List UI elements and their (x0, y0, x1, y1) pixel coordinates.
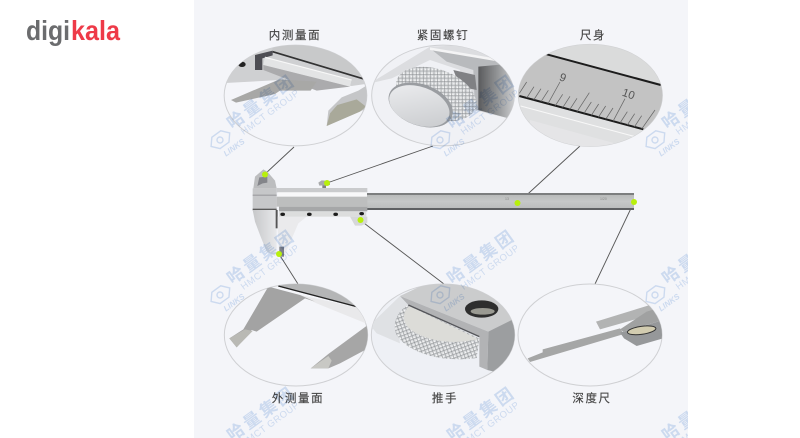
title label: locking screw: 紧固螺钉 (417, 29, 469, 42)
watermarks: brand pattern: HMCT GROUP (674, 88, 737, 138)
watermarks: brand pattern (210, 74, 688, 438)
watermarks: brand pattern: LINKS (442, 292, 467, 313)
watermarks: brand pattern: 哈量集团 (443, 70, 519, 133)
watermarks: brand pattern: HMCT GROUP (239, 88, 302, 138)
watermarks: brand pattern: LINKS (657, 137, 682, 158)
detail circle: main scale: 10 (620, 87, 636, 102)
fixed lower jaw (253, 210, 277, 256)
slider (277, 188, 367, 192)
watermarks: brand pattern: LINKS (442, 137, 467, 158)
marker dots (262, 172, 637, 257)
locking screw (318, 180, 330, 186)
detail circle: inner measuring face (220, 40, 370, 146)
watermarks: brand pattern: 哈量集团 (658, 225, 734, 288)
watermarks: brand pattern: 哈量集团 (658, 70, 734, 133)
thumb wheel (350, 217, 367, 226)
beam maker mark: 1/20 (600, 197, 607, 201)
title label: outer measuring face: 外测量面 (272, 392, 324, 405)
scale numerals on beam: 13 (505, 197, 509, 201)
watermarks: brand pattern: 哈量集团 (443, 225, 519, 288)
detail circle: depth rod (518, 284, 663, 386)
main beam (367, 193, 634, 210)
watermarks: brand pattern: 哈量集团 (223, 70, 299, 133)
upper jaw (253, 169, 277, 188)
watermarks: brand pattern: HMCT GROUP (239, 243, 302, 293)
watermarks: brand pattern: HMCT GROUP (459, 243, 522, 293)
detail circle: thumb wheel (370, 283, 515, 386)
watermarks: brand pattern: LINKS (222, 292, 247, 313)
watermarks: brand pattern: HMCT GROUP (459, 88, 522, 138)
watermarks: brand pattern: HMCT GROUP (674, 243, 737, 293)
detail circle: locking screw (370, 43, 515, 146)
logo: digikala (26, 15, 120, 46)
logo: digikala: digi (26, 15, 70, 46)
detail circle: outer measuring face (224, 280, 370, 386)
detail circle: main scale: 9 (558, 72, 568, 85)
title label: main scale: 尺身 (580, 28, 606, 42)
panel: product background (194, 0, 688, 438)
caliper: full instrument (253, 169, 634, 257)
detail circle: main scale (513, 40, 667, 148)
title label: thumb wheel: 推手 (432, 391, 458, 405)
watermarks: brand pattern: LINKS (222, 137, 247, 158)
head (253, 188, 277, 210)
watermarks: brand pattern: 哈量集团 (223, 225, 299, 288)
title label: depth rod: 深度尺 (572, 391, 612, 405)
sliding lower jaw (278, 217, 307, 257)
watermarks: brand pattern: LINKS (657, 292, 682, 313)
logo: digikala: kala (71, 15, 120, 46)
title label: inner measuring face: 内测量面 (269, 28, 321, 42)
leader lines (265, 146, 634, 284)
